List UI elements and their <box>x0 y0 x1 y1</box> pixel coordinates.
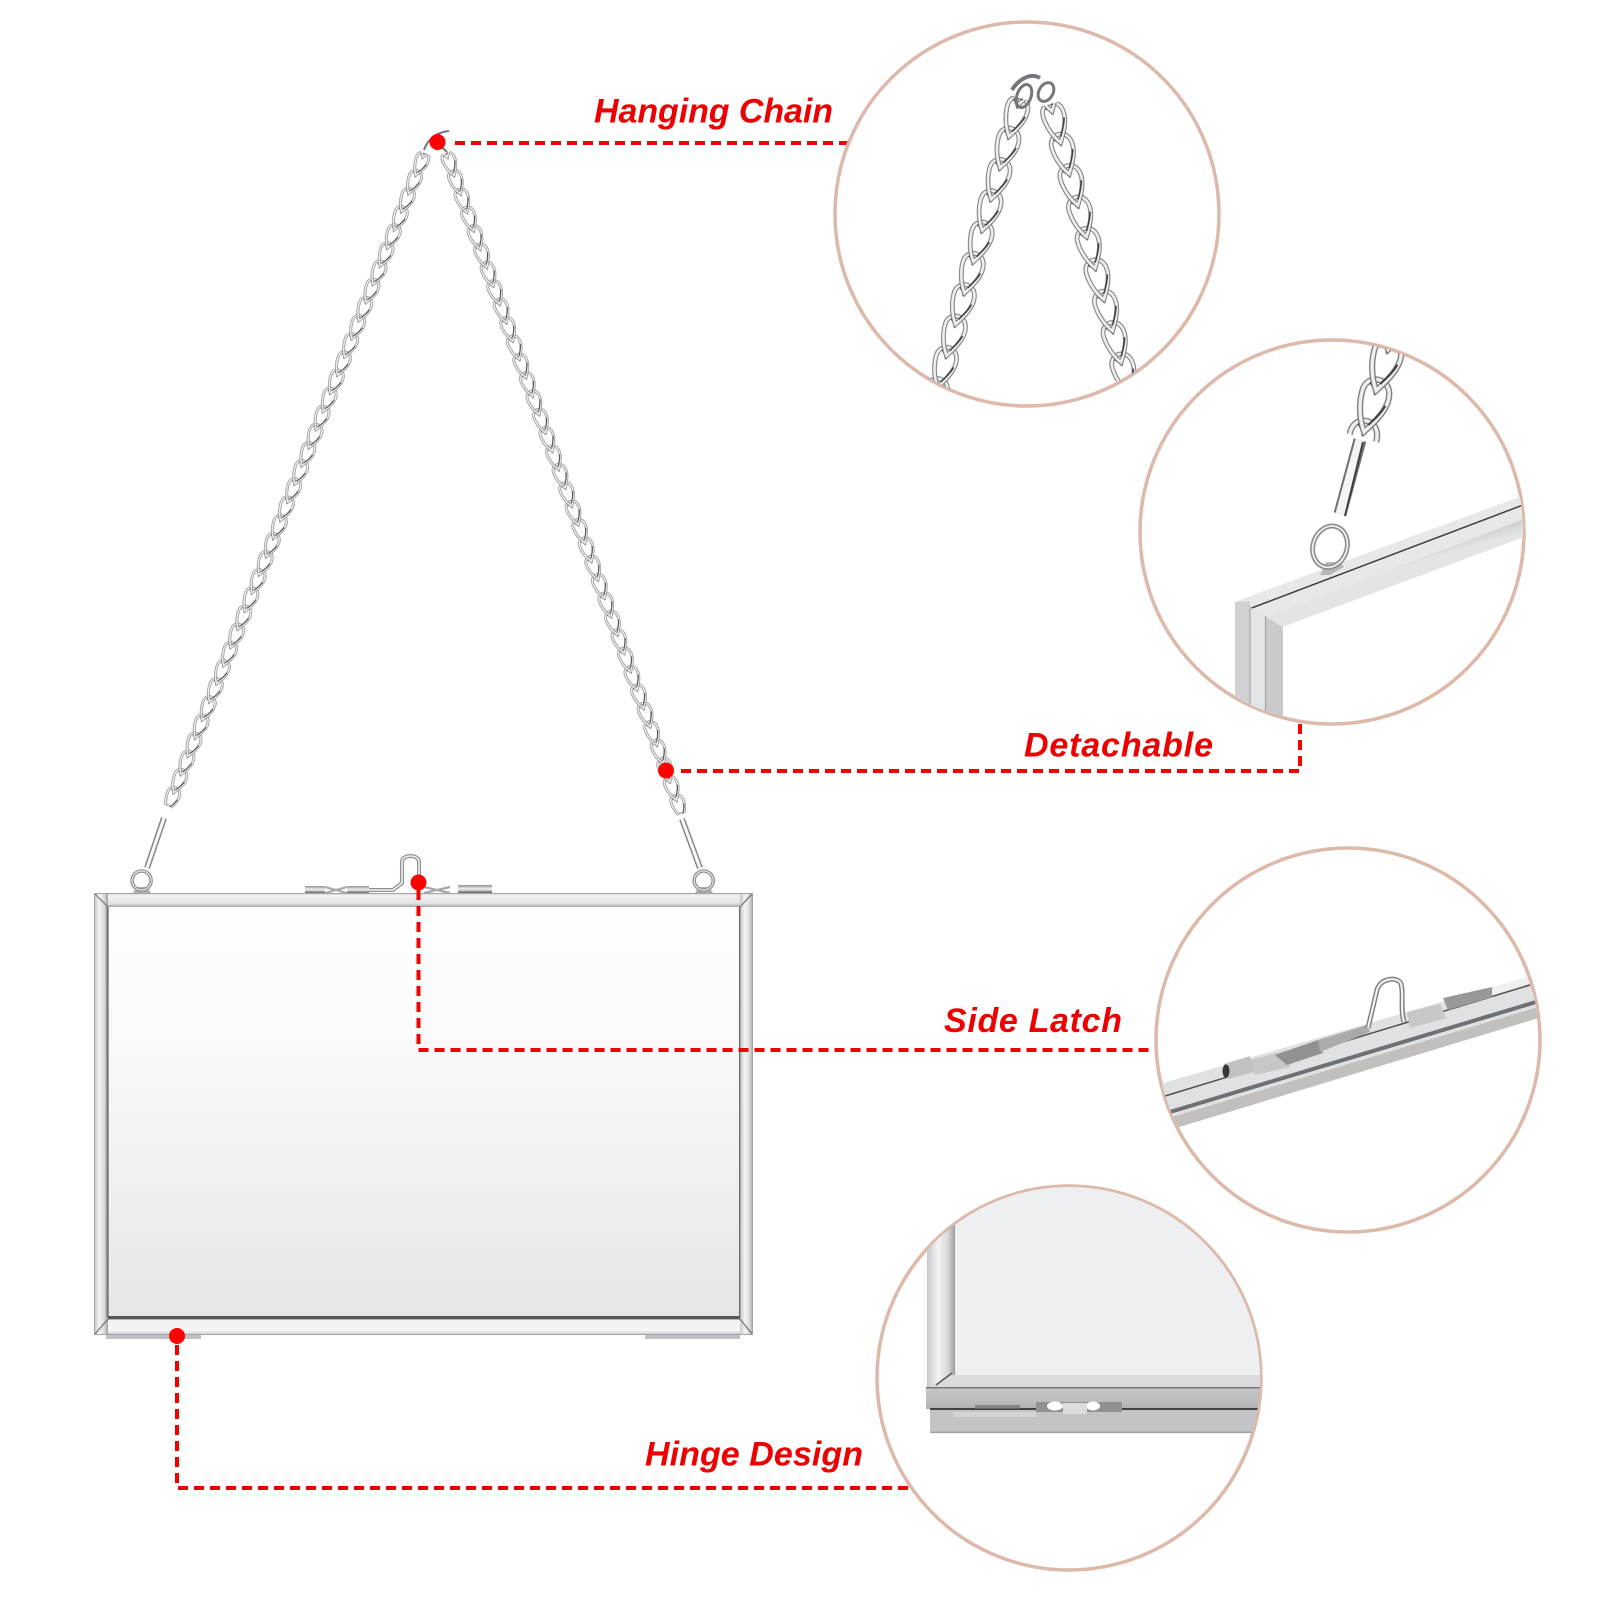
label: Side Latch <box>944 1002 1122 1040</box>
detail circle: hinge <box>877 1180 1266 1570</box>
label: Hinge Design <box>645 1436 863 1474</box>
chain top loop <box>424 131 449 152</box>
marker dot <box>430 134 446 150</box>
hanging frame product <box>94 131 753 1339</box>
callout: hanging chain <box>430 22 1219 406</box>
right swivel clip and ring <box>682 819 713 893</box>
detail circle: clip and corner <box>1140 333 1524 724</box>
left chain <box>158 149 435 811</box>
callout: hinge design <box>169 1180 1266 1570</box>
left swivel clip and ring <box>132 818 164 893</box>
connector line <box>455 141 852 145</box>
connector line <box>177 1345 916 1488</box>
right chain <box>436 149 692 818</box>
label: Hanging Chain <box>594 92 833 130</box>
callout: side latch <box>410 848 1542 1232</box>
marker dot <box>658 762 674 778</box>
callout: detachable <box>658 333 1524 778</box>
side latch <box>305 856 492 894</box>
marker dot <box>169 1328 185 1344</box>
connector line <box>681 724 1300 771</box>
frame <box>94 893 753 1335</box>
bottom hinges <box>106 1334 740 1339</box>
connector line <box>418 890 1158 1050</box>
label: Detachable <box>1024 726 1213 764</box>
detail circle: latch <box>1156 848 1542 1232</box>
marker dot <box>410 874 426 890</box>
detail circle: chain <box>835 22 1219 406</box>
